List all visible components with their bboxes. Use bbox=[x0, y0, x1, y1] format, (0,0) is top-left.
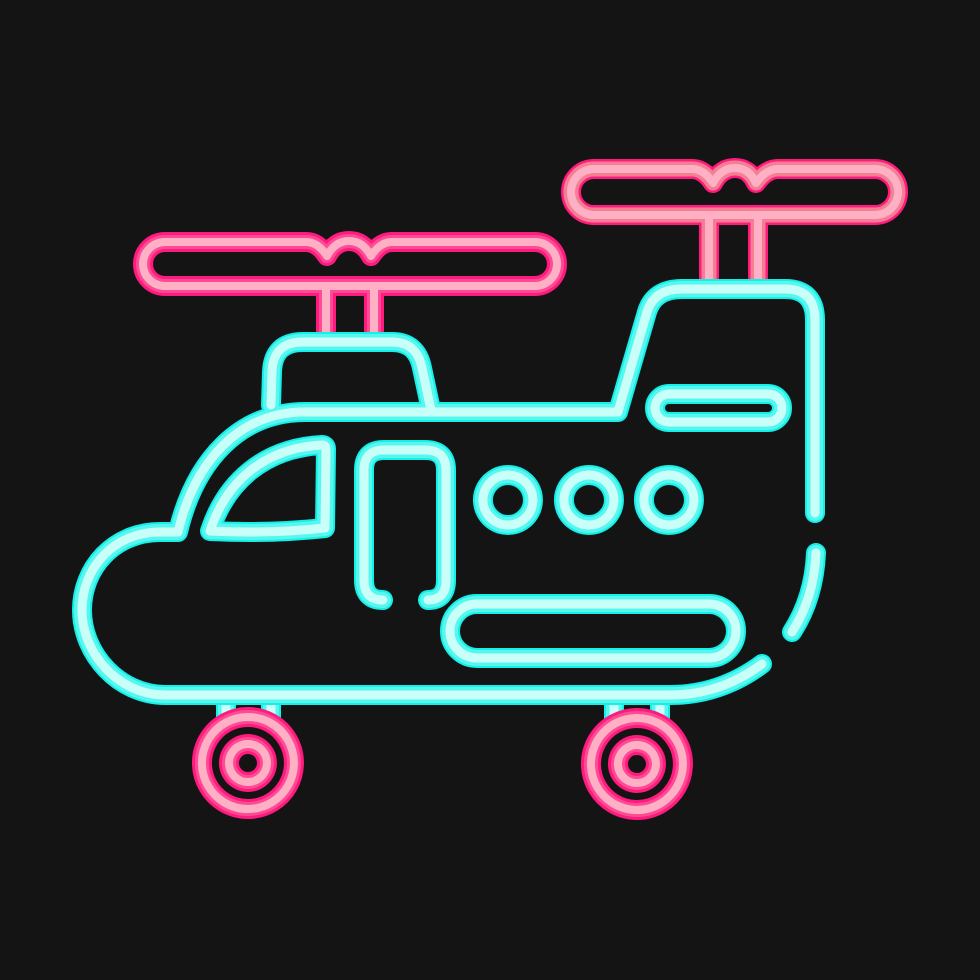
rear wheel bbox=[591, 718, 683, 810]
door bbox=[364, 450, 446, 600]
front wheel bbox=[202, 717, 294, 809]
round window 1 bbox=[483, 475, 533, 525]
icon: front rotor with mast bbox=[143, 241, 557, 335]
cockpit window bbox=[210, 445, 326, 532]
tail curve segment bbox=[792, 553, 816, 632]
tail vent pill bbox=[655, 394, 782, 422]
rear landing gear struts bbox=[614, 695, 660, 722]
fuselage outline bbox=[82, 289, 815, 695]
round window 2 bbox=[564, 475, 614, 525]
front landing gear struts bbox=[226, 695, 271, 722]
side panel pill bbox=[450, 604, 736, 658]
icon: rear rotor with mast bbox=[571, 168, 898, 280]
round window 3 bbox=[644, 475, 694, 525]
